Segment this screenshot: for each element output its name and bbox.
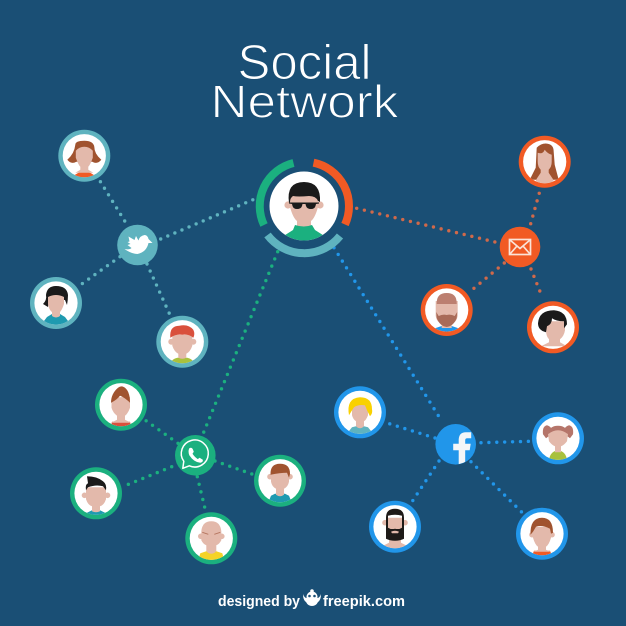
avatar: man spiky black hair xyxy=(70,467,122,519)
dotted connectors: twitter group xyxy=(82,181,257,315)
icon: freepik logo xyxy=(303,589,321,606)
dotted connectors: facebook group xyxy=(334,248,530,513)
icon: whatsapp xyxy=(181,440,208,468)
arc: orange xyxy=(314,163,349,224)
avatar: red curly hair xyxy=(156,316,208,368)
portrait xyxy=(270,172,338,242)
dotted connectors: email group xyxy=(357,193,543,298)
title xyxy=(210,36,400,128)
avatar: bald man yellow shirt xyxy=(185,512,237,564)
arc: green xyxy=(260,163,294,225)
arc: teal xyxy=(268,235,340,253)
twitter hub xyxy=(117,225,158,265)
title: Network xyxy=(210,76,400,128)
title: Social xyxy=(238,36,372,90)
avatar: woman long hair xyxy=(519,136,571,188)
footer credit xyxy=(218,589,405,610)
avatar: person black hair teal shirt xyxy=(30,277,82,329)
avatar: bearded man blue shirt xyxy=(421,284,473,336)
footer credit: designed by xyxy=(218,594,300,610)
icon: facebook f xyxy=(453,432,471,466)
avatar: black swept hair xyxy=(527,301,579,353)
avatar: blonde hair xyxy=(334,386,386,438)
email hub xyxy=(500,227,540,267)
icon: twitter bird xyxy=(124,235,152,254)
icon: envelope xyxy=(510,240,530,254)
avatar: man brown hair orange shirt xyxy=(516,508,568,560)
avatar: woman hair bun red top xyxy=(95,379,147,431)
avatar: girl pigtails xyxy=(532,412,584,464)
avatar: woman brown hair xyxy=(58,130,110,182)
central avatar with progress arcs xyxy=(260,163,349,253)
footer credit: freepik.com xyxy=(323,594,405,610)
facebook hub xyxy=(435,424,476,466)
whatsapp hub xyxy=(175,435,216,476)
dotted connectors: whatsapp group xyxy=(127,252,278,507)
avatar: man brown hair teal shirt xyxy=(254,455,306,507)
avatar: man long black beard xyxy=(369,501,421,553)
